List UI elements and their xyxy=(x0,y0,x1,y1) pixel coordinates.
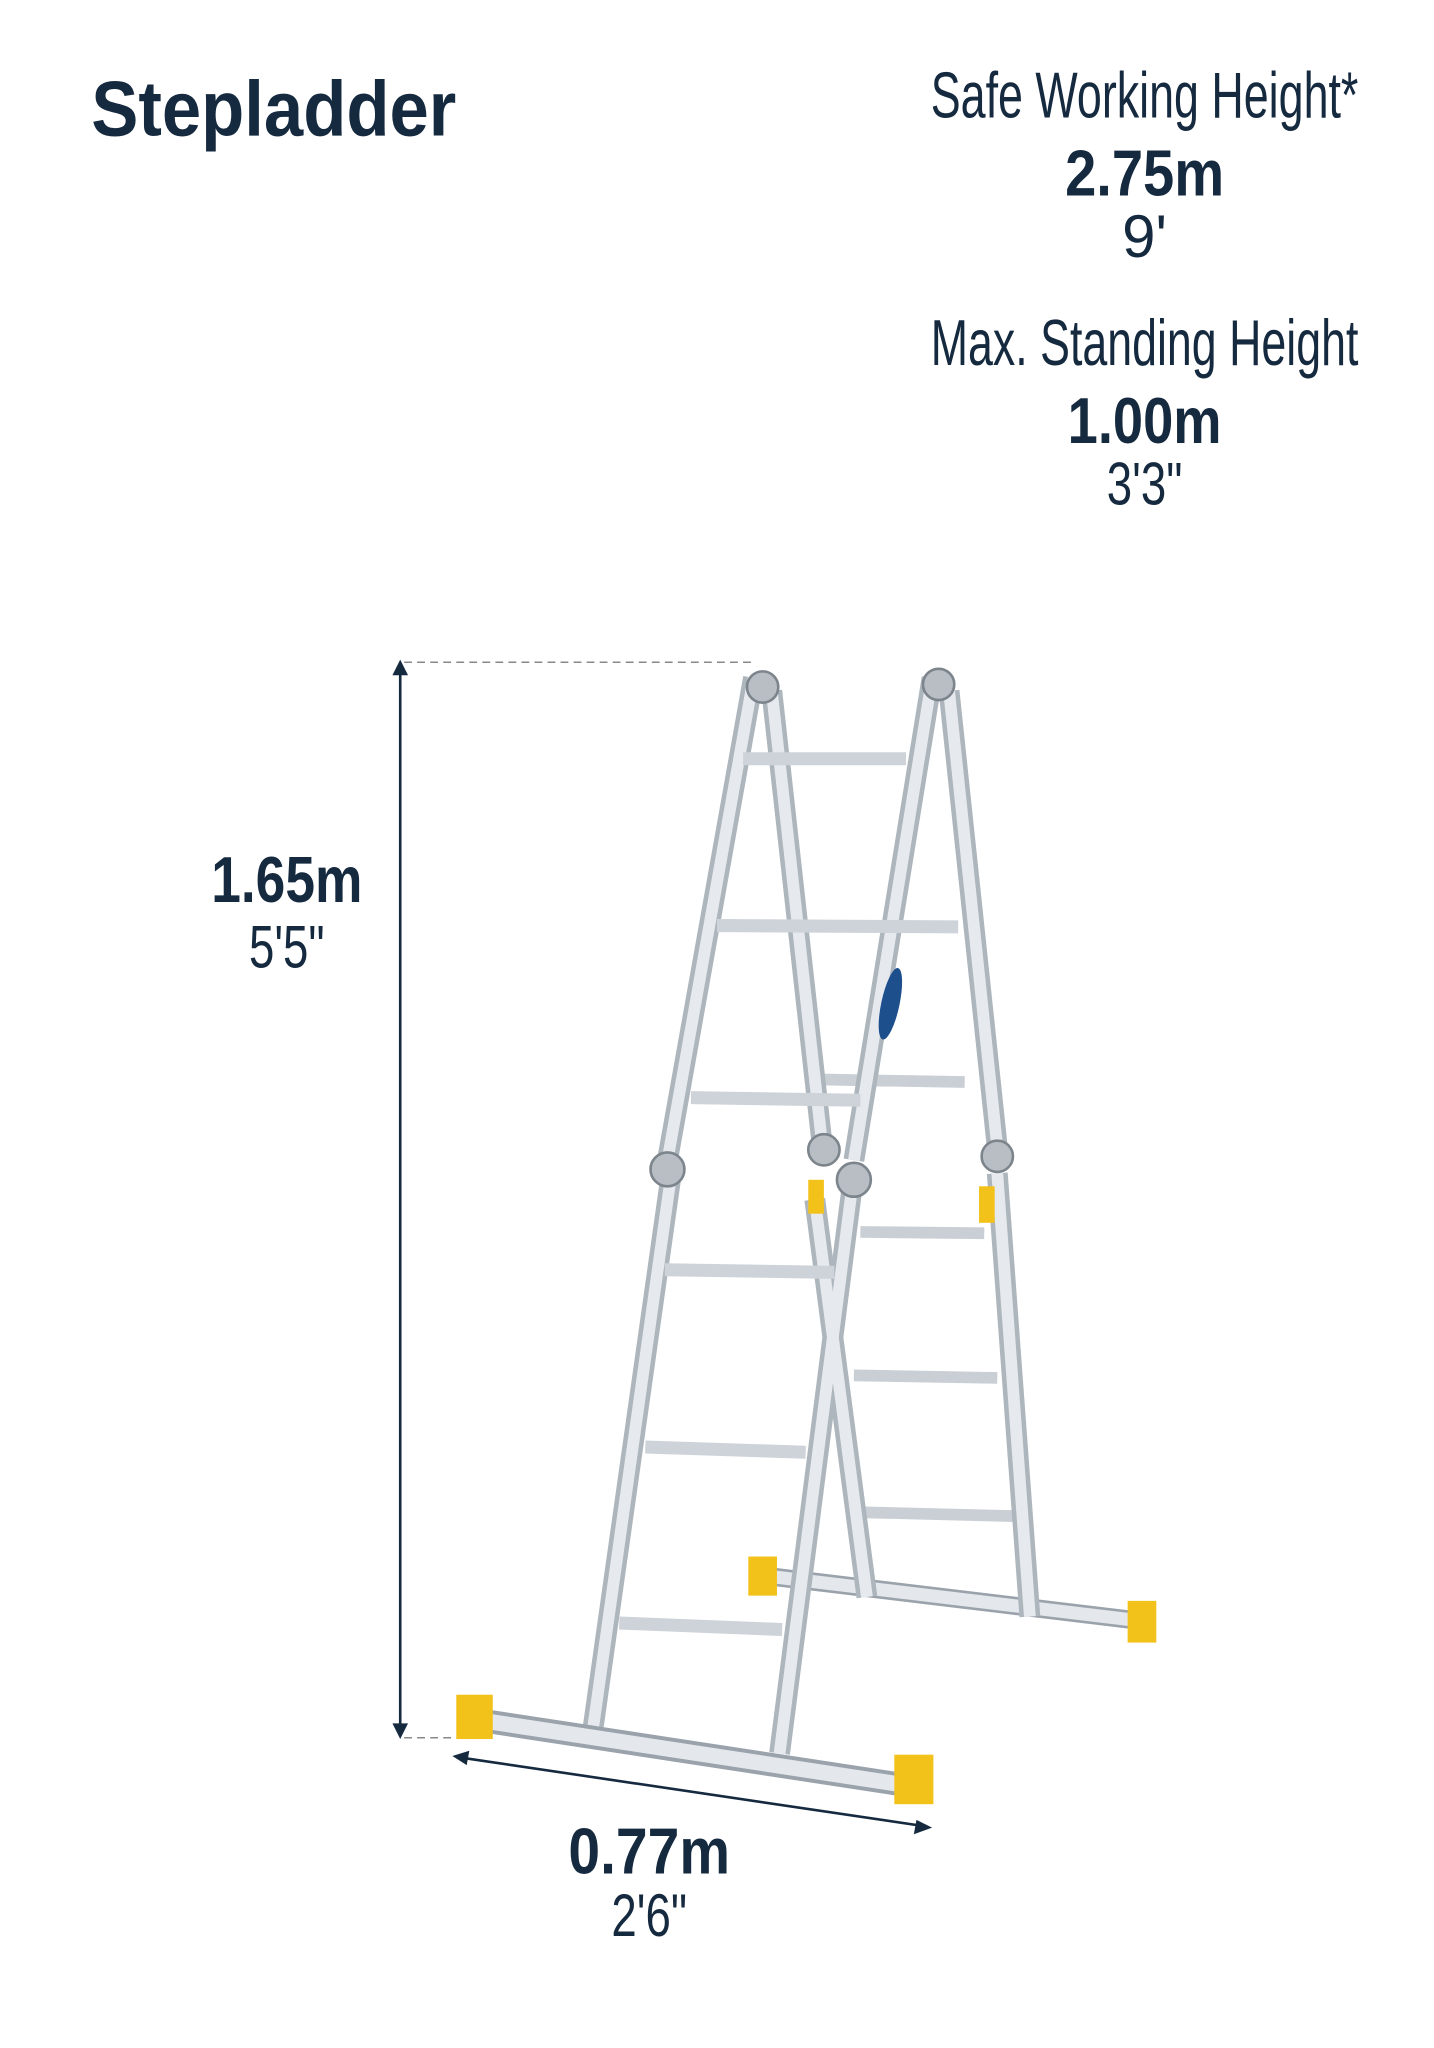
spec: safe working height: 9' xyxy=(1122,203,1167,270)
height label: 5'5" xyxy=(249,913,325,980)
rear base bar xyxy=(748,1557,1156,1643)
yellow locks xyxy=(808,1180,995,1223)
height label xyxy=(211,843,362,980)
spec: max standing height: 1.00m xyxy=(1068,384,1222,457)
brand badge xyxy=(874,966,907,1041)
spec: max standing height: 3'3" xyxy=(1107,451,1182,518)
rails xyxy=(593,678,1030,1753)
height label: 1.65m xyxy=(211,843,362,916)
spec: safe working height: 2.75m xyxy=(1065,137,1224,210)
rear rungs xyxy=(815,1079,1014,1516)
width label: 0.77m xyxy=(568,1814,730,1887)
title: Stepladder xyxy=(91,65,456,153)
width dimension arrow xyxy=(452,1751,932,1834)
spec: safe working height xyxy=(931,58,1358,270)
width label xyxy=(568,1814,730,1949)
spec: max standing height xyxy=(931,306,1358,518)
front base bar xyxy=(456,1695,933,1804)
front rungs xyxy=(619,759,958,1630)
ladder illustration xyxy=(456,669,1156,1804)
hinges xyxy=(651,669,1013,1197)
height dimension arrow xyxy=(392,660,756,1739)
width label: 2'6" xyxy=(611,1882,687,1949)
